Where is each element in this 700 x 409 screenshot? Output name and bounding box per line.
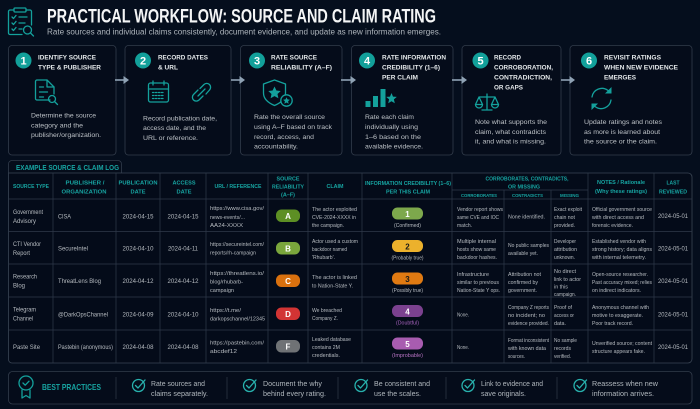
table row: government advisory: Advisory — [13, 219, 36, 225]
step 4 description — [365, 114, 423, 150]
step 5 heading: CORROBORATION, — [494, 64, 553, 72]
credibility badge 5 improbable — [392, 338, 423, 359]
table header row: LAST — [666, 180, 680, 186]
table row: CTI vendor report: 'Rhubarb'. — [312, 255, 335, 261]
table row: government advisory: provided. — [554, 223, 575, 229]
table row: paste site: sources. — [508, 354, 525, 360]
table row: government advisory: Official government source — [592, 207, 652, 213]
table header row: PUBLICATION — [118, 180, 158, 186]
table row: paste site: credentials. — [312, 353, 340, 359]
step 6 description — [584, 119, 663, 146]
step 3 heading — [271, 54, 332, 72]
step 2 description — [143, 116, 217, 142]
table row: research blog: campaign — [210, 288, 234, 294]
credibility badge 5 improbable: 5 — [405, 340, 410, 349]
table row: paste site: Format inconsistent — [508, 338, 549, 344]
table row: CTI vendor report: Actor used a custom — [312, 239, 358, 245]
table row: CTI vendor report: with internal telemetry. — [591, 255, 646, 261]
table row: government advisory: 2024-04-15 — [168, 214, 199, 220]
icon: document with magnifier — [36, 80, 58, 104]
practice: link to evidence — [462, 379, 543, 398]
credibility badge 4 doubtful: 4 — [405, 307, 410, 316]
reliability badge D: D — [285, 310, 291, 319]
table row: paste site: contains 2M — [312, 345, 340, 351]
credibility badge 4 doubtful: (Doubtful) — [396, 320, 419, 326]
table row: government advisory: match. — [457, 223, 472, 229]
table header row: CORROBORATES, CONTRADICTS, — [486, 176, 569, 182]
step 5 heading: RECORD — [494, 54, 521, 62]
table row: paste site: Unverified source; content — [592, 341, 652, 347]
credibility badge 3 possibly true — [392, 272, 423, 294]
table row: paste site: Pastebin (anonymous) — [58, 345, 113, 351]
table row: CTI vendor report: Report — [13, 251, 30, 257]
table row: paste site: structure appears fake. — [592, 349, 645, 355]
step 1 description: category and the — [31, 122, 83, 129]
arrow: step 4 to 5 — [452, 76, 467, 84]
step 4 heading: CREDIBILITY (1–6) — [382, 64, 440, 72]
table header row: SOURCE — [276, 176, 300, 182]
practice: document the why: Document the why — [263, 379, 322, 388]
table row: paste site: Paste Site — [13, 345, 41, 351]
step 2 heading — [158, 54, 208, 72]
table row: telegram channel: evidence provided. — [508, 321, 549, 327]
table row: research blog: ThreatLens Blog — [58, 279, 101, 285]
practice: be consistent: Be consistent and — [374, 379, 430, 388]
table row: research blog: Infrastructure — [457, 272, 489, 278]
step 3 number: 3 — [254, 56, 260, 68]
credibility badge 1 confirmed: (Confirmed) — [394, 223, 421, 229]
step 4 description: Rate each claim — [365, 114, 414, 121]
table row: CTI vendor report: 2024-04-10 — [122, 246, 154, 252]
panel: best practices — [8, 372, 692, 404]
table row: research blog: No direct — [554, 269, 577, 275]
step 4 heading — [382, 54, 446, 82]
table row: CTI vendor report: hosts show same — [457, 247, 496, 253]
step 3 description: accountability. — [254, 144, 298, 150]
practice: rate separately: Rate sources and — [151, 379, 205, 388]
table row: paste site: 2024-04-08 — [122, 345, 154, 351]
table row: government advisory: AA24-XXXX — [210, 223, 243, 229]
practice: link to evidence: save originals. — [481, 389, 526, 398]
table header row: OR MISSING — [508, 184, 540, 190]
step 2 description: access date, and the — [143, 125, 206, 132]
panel: step 5 corroboration — [462, 46, 561, 155]
table row: research blog: confirmed by — [508, 280, 538, 286]
practice: document the why: behind every rating. — [263, 389, 326, 398]
practice: reassess: information arrives. — [592, 389, 654, 398]
credibility badge 3 possibly true: 3 — [405, 275, 410, 284]
practice: rate separately: claims separately. — [151, 389, 208, 398]
step 4 heading: RATE INFORMATION — [382, 54, 446, 62]
step 6 heading: EMERGES — [604, 74, 636, 82]
reliability badge B: B — [285, 244, 291, 253]
table row: telegram channel: motive to exaggerate. — [592, 313, 643, 319]
table row: telegram channel — [13, 305, 689, 327]
table row: telegram channel: We breached — [312, 308, 342, 314]
table row: paste site: https://pastebin.com/ — [210, 340, 265, 346]
table header row: ACCESS — [172, 180, 196, 186]
table row: research blog: Past accuracy mixed; relies — [592, 280, 652, 286]
step 1 heading — [38, 54, 101, 72]
table row: paste site: 2024-04-08 — [168, 345, 199, 351]
table row: telegram channel: Anonymous channel with — [592, 305, 649, 311]
table header row: DATE — [130, 190, 146, 196]
table row: CTI vendor report: CTI Vendor — [13, 242, 41, 248]
step 6 number: 6 — [586, 56, 592, 68]
table row: CTI vendor report: backdoor hashes. — [457, 255, 497, 261]
table header row: MISSING — [560, 193, 579, 199]
best practices heading: BEST PRACTICES — [42, 383, 101, 392]
table row: CTI vendor report: https://secureintel.com/ — [210, 242, 264, 248]
table row: telegram channel: 2024-05-01 — [658, 312, 689, 318]
table row: CTI vendor report: Developer — [554, 239, 576, 245]
step 5 heading: CONTRADICTION, — [494, 74, 552, 82]
credibility badge 1 confirmed: 1 — [405, 210, 410, 219]
table header row — [13, 176, 687, 199]
step 4 number: 4 — [364, 56, 371, 68]
step 5 description — [475, 119, 547, 146]
table row: research blog: campaign. — [554, 292, 576, 298]
table header row: INFORMATION CREDIBILITY (1–6) — [365, 181, 451, 187]
table row: telegram channel: data. — [554, 321, 566, 327]
practice: reassess: Reassess when new — [592, 379, 658, 388]
table row: paste site: Leaked database — [312, 337, 351, 343]
table tab heading — [8, 160, 122, 173]
table header row: DATE — [176, 190, 192, 196]
credibility badge 2 probably true — [392, 240, 424, 262]
step 5 heading — [494, 54, 553, 92]
step 6 heading: REVISIT RATINGS — [604, 54, 661, 62]
table row: CTI vendor report: 2024-05-01 — [658, 246, 689, 252]
table row: government advisory — [13, 206, 689, 229]
step 4 heading: PER CLAIM — [382, 74, 418, 82]
table header row: PER THIS CLAIM — [386, 190, 430, 196]
table row: paste site: No sample — [554, 338, 577, 344]
table row: telegram channel: Proof of — [554, 305, 572, 311]
credibility badge 5 improbable: (Improbable) — [392, 353, 423, 359]
table row: telegram channel: no incident; no — [508, 313, 545, 319]
table row: research blog: https://threatlens.io/ — [210, 271, 265, 277]
arrow: step 1 to 2 — [115, 76, 129, 84]
table row: government advisory: Government — [13, 210, 43, 216]
step 3 description: record, access, and — [254, 134, 314, 141]
icon: calendar — [148, 81, 168, 102]
table row: research blog: blog/rhubarb- — [210, 280, 243, 286]
table header row: (Why these ratings) — [595, 189, 647, 195]
table row: government advisory: chain not — [554, 215, 575, 221]
reliability badge A: A — [285, 212, 291, 221]
step 6 heading — [604, 54, 678, 82]
step 4 description: available evidence. — [365, 144, 423, 150]
table row: government advisory: 2024-05-01 — [658, 214, 689, 220]
table row: CTI vendor report: 2024-04-11 — [168, 246, 199, 252]
table row: CTI vendor report: backdoor named — [312, 247, 347, 253]
table row: CTI vendor report: SecureIntel — [58, 246, 88, 252]
practice: rate separately — [132, 379, 208, 398]
step 2 heading: & URL — [158, 64, 178, 72]
panel: step 6 revisit ratings — [570, 46, 692, 155]
table row: CTI vendor report: Established vendor with — [592, 239, 646, 245]
credibility badge 3 possibly true: (Possibly true) — [392, 288, 423, 294]
table row: paste site — [13, 337, 689, 360]
table header row: RELIABILITY — [272, 184, 304, 190]
table row: research blog — [13, 269, 689, 298]
table header row: REVIEWED — [659, 190, 687, 196]
table header row: CONTRADICTS — [512, 193, 544, 199]
reliability badge B — [276, 242, 300, 254]
step 5 heading: OR GAPS — [494, 84, 523, 92]
reliability badge A — [276, 210, 300, 222]
table header row: NOTES / Rationale — [597, 180, 645, 186]
table row: paste site: abcdef12 — [210, 349, 237, 355]
table row: CTI vendor report: available yet. — [508, 251, 538, 257]
step 6 description: Update ratings and notes — [584, 119, 663, 126]
table row: CTI vendor report: strong history; data aligns — [592, 247, 652, 253]
step 2 description: URL or reference. — [143, 135, 198, 142]
table row: government advisory: CVE-2024-XXXX in — [312, 215, 356, 221]
table row: government advisory: The actor exploited — [312, 207, 357, 213]
table row: telegram channel: Company Z. — [312, 316, 338, 322]
step 1 heading: IDENTIFY SOURCE — [38, 54, 96, 62]
reliability badge F — [276, 340, 300, 352]
practice: reassess — [574, 379, 658, 398]
table row: research blog: government. — [508, 288, 537, 294]
table row: telegram channel: Telegram — [13, 307, 36, 313]
credibility badge 2 probably true: 2 — [405, 242, 410, 251]
table row: government advisory: Exact exploit — [554, 207, 582, 213]
table row: CTI vendor report: Multiple internal — [457, 239, 496, 245]
table row: research blog: on indirect indicators. — [592, 288, 641, 294]
table row: CTI vendor report — [13, 239, 689, 262]
icon: shield with star badge — [264, 80, 292, 106]
table row: government advisory: Vendor report shows — [457, 207, 503, 213]
panel: step 1 identify source — [8, 46, 116, 155]
reliability badge C — [276, 274, 300, 287]
table row: telegram channel: None. — [457, 312, 469, 318]
practice: link to evidence: Link to evidence and — [481, 379, 543, 388]
step 3 description — [254, 114, 333, 150]
table row: paste site: None. — [457, 345, 469, 351]
step 1 description: Determine the source — [31, 112, 96, 120]
panel: step 2 record dates — [125, 46, 231, 155]
icon: award ribbon — [19, 376, 33, 398]
step 2 heading: RECORD DATES — [158, 54, 208, 62]
table row: research blog: Open-source researcher. — [592, 272, 648, 278]
step 3 description: Rate the overall source — [254, 114, 325, 121]
step 6 description: as more is learned about — [584, 129, 660, 136]
table row: CTI vendor report: reports/rh-campaign — [210, 250, 256, 256]
table row: paste site: with known data — [507, 346, 546, 352]
step 1 description: publisher/organization. — [31, 132, 101, 139]
table row: telegram channel: 2024-04-09 — [122, 312, 154, 318]
step 5 description: claim, what contradicts — [475, 129, 547, 136]
table row: research blog: 2024-04-12 — [168, 279, 199, 285]
icon: bars with star — [366, 89, 397, 107]
table row: research blog: 2024-05-01 — [658, 279, 689, 285]
table row: research blog: in this — [554, 284, 568, 290]
step 2 description: Record publication date, — [143, 116, 217, 122]
table row: government advisory: the campaign. — [312, 223, 344, 229]
table row: government advisory: news-events/... — [210, 215, 245, 221]
panel: step 3 source reliability — [240, 46, 342, 155]
step 4 description: individually using — [365, 124, 418, 131]
table header row: ORGANIZATION — [62, 190, 106, 196]
table row: government advisory: https://www.cisa.gov/ — [210, 206, 265, 212]
arrow: step 3 to 4 — [341, 76, 356, 84]
icon: chain link — [192, 83, 211, 101]
table row: CTI vendor report: attribution — [554, 247, 577, 253]
table row: research blog: The actor is linked — [312, 275, 357, 281]
table row: telegram channel: https://t.me/ — [210, 308, 242, 314]
arrow: step 5 to 6 — [561, 76, 575, 84]
icon: refresh arrows — [592, 87, 612, 110]
credibility badge 4 doubtful — [392, 305, 423, 326]
table header row: PUBLISHER / — [66, 180, 105, 186]
step 1 description — [31, 112, 101, 139]
table header row: (A–F) — [281, 192, 295, 198]
title: PRACTICAL WORKFLOW: SOURCE AND CLAIM RATING — [47, 6, 436, 28]
subtitle: Rate sources and individual claims consistently, document evidence, and update as new information emerges. — [47, 28, 441, 36]
table row: research blog: Blog — [13, 283, 25, 289]
step 3 description: using A–F based on track — [254, 124, 333, 131]
table row: telegram channel: Company Z reports — [508, 305, 549, 311]
step 2 number: 2 — [140, 56, 146, 68]
table row: research blog: Nation-State Y ops. — [457, 288, 500, 294]
table row: CTI vendor report: unknown. — [554, 255, 575, 261]
practice: be consistent: use the scales. — [374, 389, 421, 398]
arrow: step 2 to 3 — [231, 76, 245, 84]
table row: telegram channel: Channel — [13, 316, 33, 322]
step 1 heading: TYPE & PUBLISHER — [38, 64, 101, 72]
table row: telegram channel: 2024-04-10 — [168, 312, 199, 318]
table row: research blog: Attribution not — [508, 272, 541, 278]
step 4 description: 1–6 based on the — [365, 134, 421, 141]
table row: government advisory: same CVE and IOC — [457, 215, 499, 221]
credibility badge 2 probably true: (Probably true) — [392, 256, 424, 262]
table header row: URL / REFERENCE — [214, 184, 262, 190]
practice: document the why — [244, 379, 326, 398]
table row: telegram channel: darkopschannel/12345 — [210, 316, 265, 322]
table row: paste site: records — [554, 346, 571, 352]
table row: government advisory: forensic evidence. — [592, 223, 633, 229]
table row: CTI vendor report: No public samples — [508, 243, 549, 249]
table row: government advisory: None identified. — [508, 214, 545, 220]
step 5 number: 5 — [477, 56, 484, 68]
table tab heading: EXAMPLE SOURCE & CLAIM LOG — [16, 163, 119, 172]
table row: government advisory: with direct access and — [591, 215, 644, 221]
step 1 number: 1 — [20, 56, 27, 68]
table row: research blog: 2024-04-12 — [122, 279, 154, 285]
table row: telegram channel: @DarkOpsChannel — [58, 312, 108, 318]
table header row: CLAIM — [326, 184, 344, 190]
table row: government advisory: CISA — [58, 214, 71, 220]
step 5 description: Note what supports the — [475, 119, 547, 126]
reliability badge F: F — [286, 342, 291, 351]
reliability badge D — [276, 308, 300, 320]
reliability badge C: C — [285, 277, 291, 286]
table row: research blog: link to actor — [554, 277, 581, 283]
practice: be consistent — [355, 379, 430, 398]
panel: example log table — [8, 160, 692, 363]
step 6 description: the source or the claim. — [584, 138, 657, 146]
table row: paste site: 2024-05-01 — [658, 345, 689, 351]
panel: step 4 information credibility — [352, 46, 453, 155]
table header row: SOURCE TYPE — [13, 184, 49, 190]
table header row: CORROBORATES — [461, 193, 498, 199]
table row: telegram channel: access or — [554, 313, 574, 319]
table row: telegram channel: Poor track record. — [592, 321, 633, 327]
credibility badge 1 confirmed — [392, 208, 423, 229]
step 3 heading: RELIABILITY (A–F) — [271, 64, 332, 72]
step 3 heading: RATE SOURCE — [271, 54, 317, 62]
step 5 description: it, and what is missing. — [475, 138, 546, 146]
icon: balance scale — [476, 94, 498, 110]
icon: clipboard with magnifier — [8, 8, 34, 36]
step 6 heading: WHEN NEW EVIDENCE — [604, 64, 678, 72]
table row: paste site: verified. — [554, 354, 571, 360]
table frame — [8, 173, 692, 363]
table row: research blog: similar to previous — [457, 280, 499, 286]
table row: research blog: Research — [13, 274, 37, 280]
table row: government advisory: 2024-04-15 — [122, 214, 154, 220]
table row: research blog: to Nation-State Y. — [312, 284, 353, 290]
